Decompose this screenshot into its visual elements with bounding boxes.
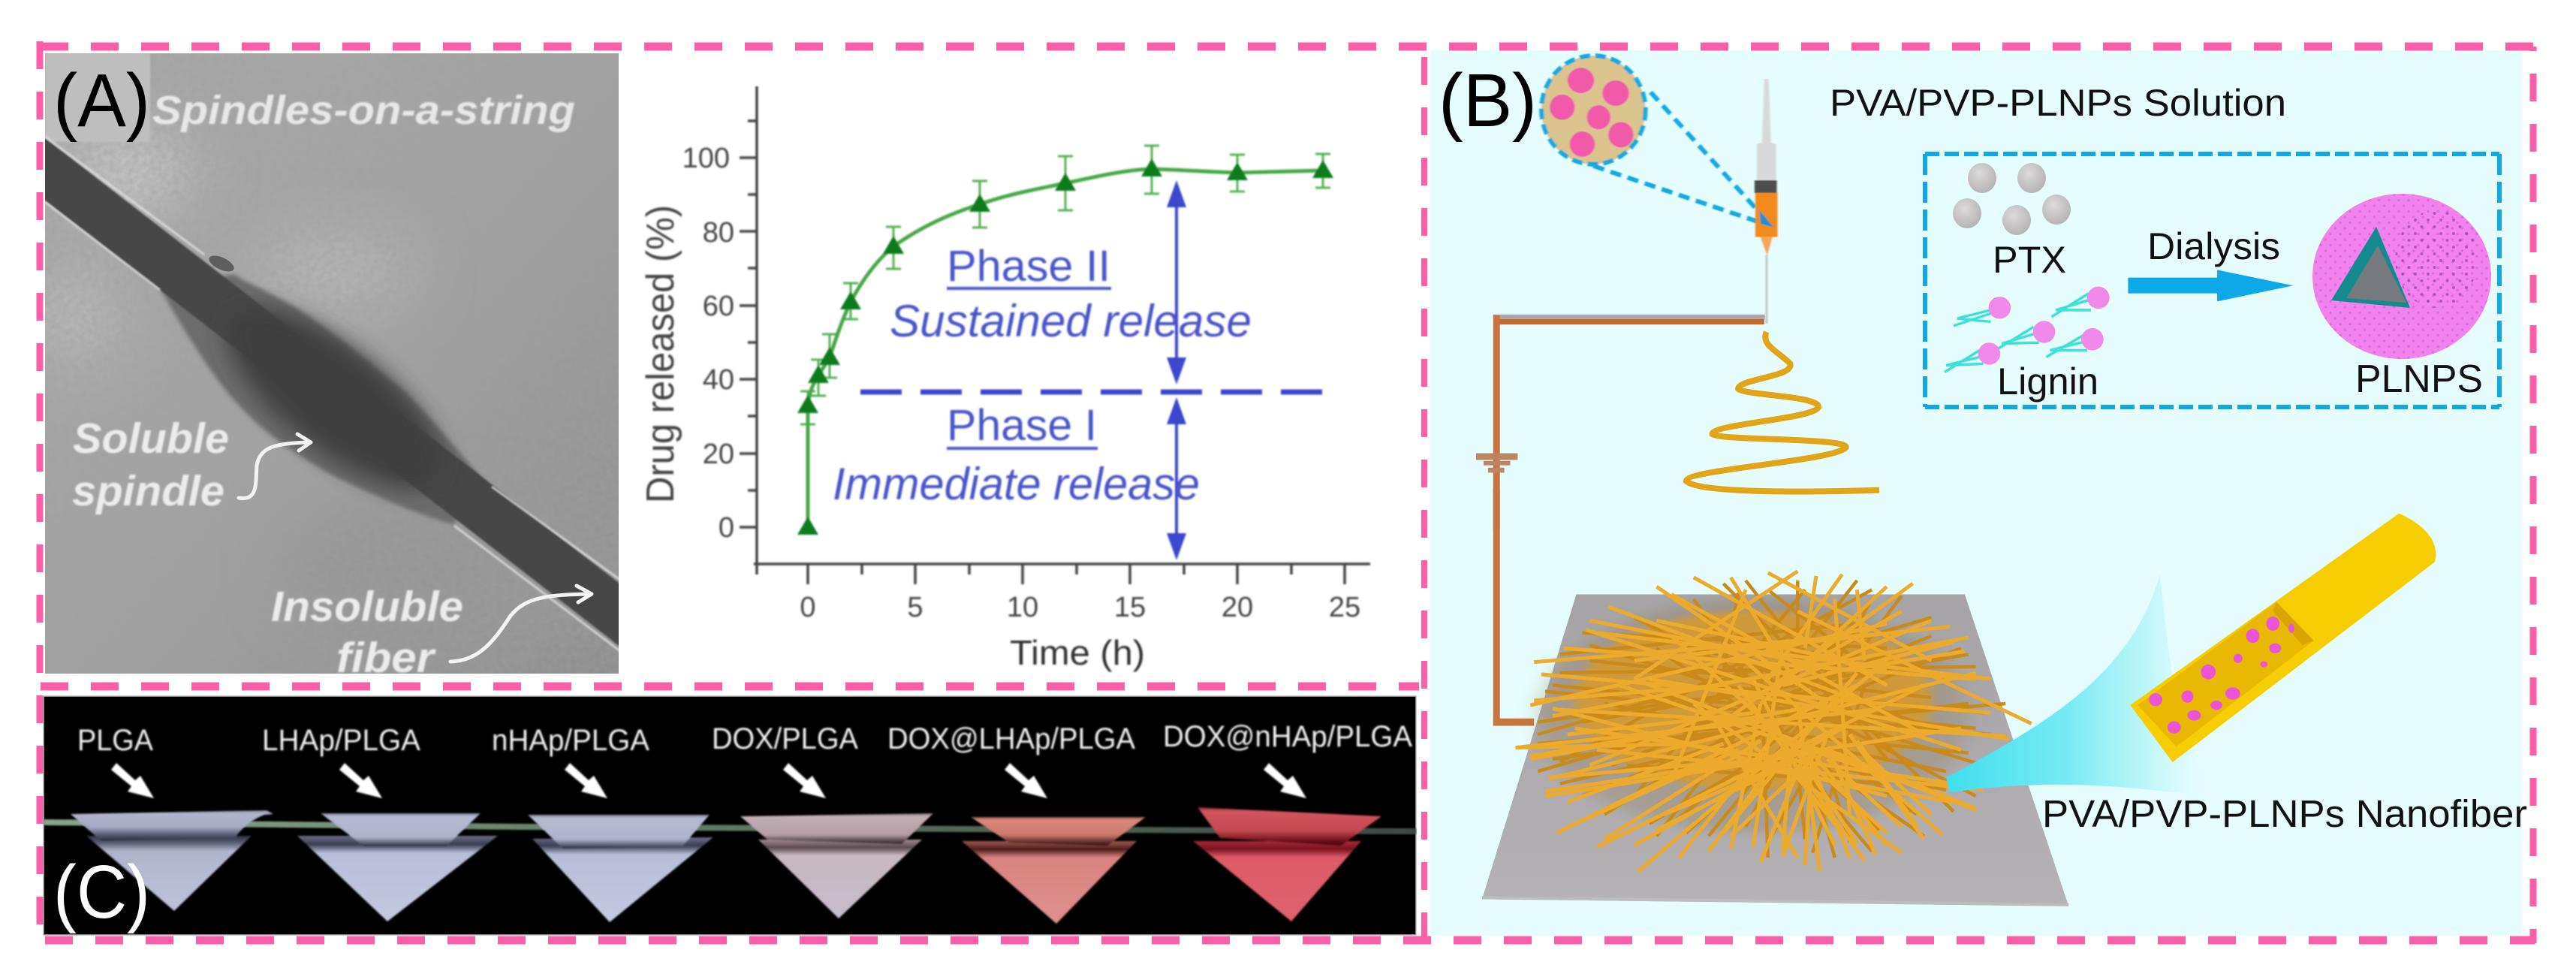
rod behind samples [44,819,1416,834]
data markers [797,158,1333,535]
y tick labels [682,143,734,544]
nanofiber mat [1515,571,2032,871]
arrow: dialysis [2128,270,2293,301]
wire lower segment [1493,488,1534,726]
panel A: TEM micrograph [30,53,638,674]
y tick labels: 80 [703,217,734,249]
y tick labels: 0 [719,512,734,544]
sample: PLGA [71,810,273,911]
TEM label: Soluble spindle: Soluble [73,415,229,463]
x tick labels: 10 [1007,592,1038,623]
y tick labels: 60 [703,291,734,322]
cyan magnification beam [1946,574,2217,796]
Phase II underline [947,287,1111,290]
circuit wire with battery [1476,315,1765,529]
label: Dialysis: Dialysis [2147,225,2280,267]
panel label: (B): (B) [1439,59,1537,143]
sample labels: DOX@LHAp/PLGA [887,722,1135,755]
release curve [808,169,1323,527]
panel: B background [1430,50,2522,936]
label: Phase I: Phase I [947,401,1097,450]
sample: DOX@LHAp/PLGA [962,817,1146,924]
label: PVA/PVP-PLNPs Nanofiber: PVA/PVP-PLNPs Nanofiber [2042,792,2527,835]
x axis [754,564,1370,584]
sample labels [77,720,1412,757]
y axis title: Drug released (%) [639,205,682,503]
sample: LHAp/PLGA [297,813,498,921]
Phase I underline [947,447,1098,450]
x tick labels: 15 [1114,592,1146,623]
collector plate [1482,594,2068,906]
PTX particles [1953,163,2071,235]
x tick labels [800,592,1360,623]
phase divider dashed line [860,389,1325,395]
y axis [740,86,757,565]
panel C: black photo background [44,696,1416,935]
single nanofiber cross-section [2130,514,2436,762]
sample labels: DOX@nHAp/PLGA [1163,720,1412,753]
lignin molecules [1945,287,2110,372]
curved arrow to insoluble fiber [450,586,592,662]
TEM label: Insoluble fiber: fiber [336,634,436,682]
sample: DOX/PLGA [740,813,933,918]
label: PVA/PVP-PLNPs Solution: PVA/PVP-PLNPs Solution [1830,82,2286,124]
inset: PLNP preparation dashed box [1925,154,2499,407]
curved arrow to spindle [239,434,311,499]
x tick labels: 20 [1222,592,1253,623]
TEM caption: Spindles-on-a-string: Spindles-on-a-string [152,88,575,133]
PLNP sphere [2312,194,2491,359]
syringe [1755,79,1778,324]
phase arrows [1167,180,1186,560]
chart: drug release curve [639,86,1370,672]
sample labels: LHAp/PLGA [262,724,420,757]
label: Phase II: Phase II [947,242,1110,291]
y tick labels: 40 [703,364,734,396]
x tick labels: 25 [1329,592,1360,623]
error bars [800,146,1330,424]
film samples [71,807,1381,924]
y tick labels: 20 [703,439,734,470]
x tick labels: 0 [800,592,816,623]
x tick labels: 5 [907,592,923,623]
sample: DOX@nHAp/PLGA [1193,807,1381,921]
panel label: (C): (C) [53,850,150,934]
panel label: (A): (A) [53,59,150,143]
sample labels: PLGA [77,724,153,757]
y tick labels: 100 [682,143,730,174]
x axis title: Time (h) [1010,633,1145,672]
inset: solution droplet with zoom lines [1541,56,1757,222]
label: PLNPS: PLNPS [2355,357,2483,401]
sample labels: nHAp/PLGA [492,724,649,757]
sample labels: DOX/PLGA [712,722,858,755]
label: Sustained release: Sustained release [890,296,1252,346]
sample: nHAp/PLGA [528,815,713,922]
label: Lignin: Lignin [1997,360,2098,403]
TEM label: Soluble spindle: spindle [72,467,224,515]
TEM label: Insoluble fiber: Insoluble [271,583,463,631]
label: PTX: PTX [1993,239,2066,281]
white arrows [111,763,1306,798]
electrospinning jet spiral [1686,332,1879,492]
label: Immediate release: Immediate release [833,459,1200,509]
